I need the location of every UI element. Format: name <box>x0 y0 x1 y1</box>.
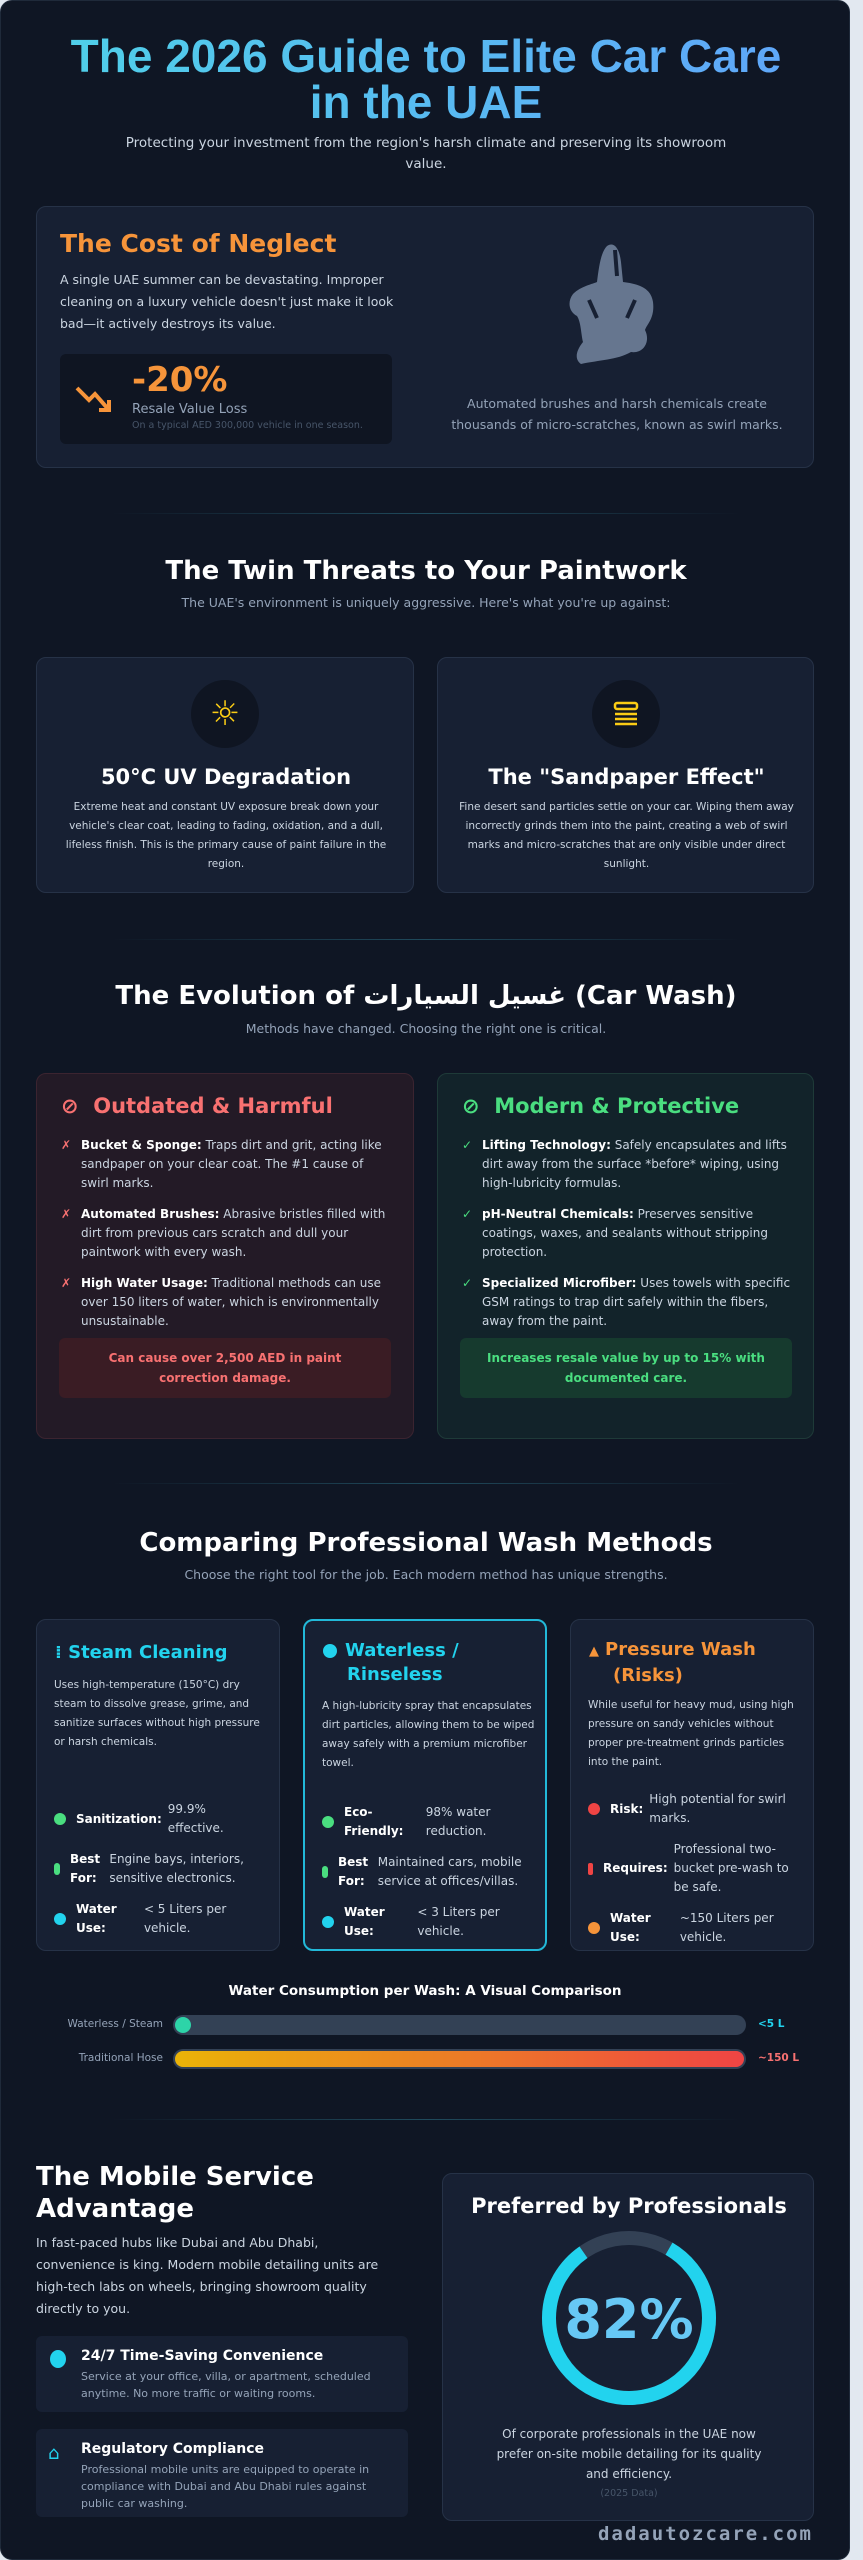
title: pressure: ▲ Pressure Wash <box>589 1639 756 1660</box>
stats: waterless: Best For: <box>338 1855 368 1888</box>
heading: mobile service: The Mobile Service Advantage <box>36 2162 314 2224</box>
icon: trending down <box>76 386 111 412</box>
panel: cost of neglect <box>36 206 814 468</box>
panel: UV degradation <box>36 657 414 893</box>
stats: waterless: Maintained cars, mobile service at offices/villas. <box>378 1855 522 1888</box>
text: mobile intro: In fast-paced hubs like Dubai and Abu Dhabi, convenience is king. Modern mobile detailing units are high-tech labs on wheels, bringing showroom quality directly to you. <box>36 2235 378 2316</box>
stats: steam: Sanitization: <box>76 1812 162 1826</box>
heading: twin threats: The Twin Threats to Your Paintwork <box>165 556 687 586</box>
list: outdated items: High Water Usage: Traditional methods can use over 150 liters of water, which is environmentally unsustainable. <box>81 1276 381 1328</box>
list: modern items: Specialized Microfiber: Uses towels with specific GSM ratings to trap dirt safely within the fibers, away from the paint. <box>482 1276 790 1328</box>
list: outdated items: Bucket & Sponge: Traps dirt and grit, acting like sandpaper on your clear coat. The #1 cause of swirl marks. <box>81 1138 382 1190</box>
callout: 2500 AED <box>59 1338 391 1398</box>
stats: waterless: Eco-Friendly: <box>344 1805 403 1838</box>
panel: steam cleaning <box>36 1619 280 1951</box>
stat box: -20% <box>60 354 392 444</box>
heading: outdated: ⊘ Outdated & Harmful <box>61 1094 333 1118</box>
text: sandpaper: Fine desert sand particles settle on your car. Wiping them away incorrectly grinds them into the paint, creating a web of swirl marks and micro-scratches that are only visible under direct sunlight. <box>459 801 794 870</box>
box: 24/7 convenience: Service at your office, villa, or apartment, scheduled anytime. No more traffic or waiting rooms. <box>81 2370 371 2400</box>
list: modern items: ✓ <box>462 1276 472 1290</box>
icon: sun: ☼ <box>210 694 240 734</box>
title: preferred: Preferred by Professionals <box>471 2194 787 2218</box>
text: pressure: While useful for heavy mud, using high pressure on sandy vehicles without proper pre-treatment grinds particles into the paint. <box>588 1699 794 1768</box>
chart: 82% donut: 82% <box>564 2288 694 2351</box>
stats: pressure: Professional two-bucket pre-wash to be safe. <box>674 1842 789 1894</box>
text: intro: A single UAE summer can be devastating. Improper cleaning on a luxury vehicle doesn't just make it look bad—it actively destroys its value. <box>60 272 393 331</box>
stats: steam: < 5 Liters per vehicle. <box>144 1902 226 1935</box>
subheading: evolution: Methods have changed. Choosing the right one is critical. <box>246 1021 606 1036</box>
list: modern items: ✓ <box>462 1207 472 1221</box>
subheading: twin threats: The UAE's environment is uniquely aggressive. Here's what you're up against: <box>182 595 670 610</box>
stats: waterless: 98% water reduction. <box>426 1805 490 1838</box>
list: outdated items <box>61 1138 385 1328</box>
list: modern items: Lifting Technology: Safely encapsulates and lifts dirt away from the surface *before* wiping, using high-lubricity formulas. <box>482 1138 787 1190</box>
stats: pressure: Risk: <box>610 1802 643 1816</box>
stats: pressure: Requires: <box>603 1861 668 1875</box>
icon: car seat silhouette <box>570 244 654 364</box>
title <box>31 33 821 125</box>
box: 24/7 convenience <box>36 2336 408 2412</box>
title: steam: ⁞ Steam Cleaning <box>55 1642 227 1663</box>
title: pressure <box>589 1639 756 1686</box>
stat box: -20%: Resale Value Loss <box>132 402 247 417</box>
text: UV: Extreme heat and constant UV exposure break down your vehicle's clear coat, leading to fading, oxidation, and a dull, lifeless finish. This is the primary cause of paint failure in the region. <box>66 801 386 870</box>
title: sandpaper: The "Sandpaper Effect" <box>488 765 765 789</box>
callout: resale value <box>460 1338 792 1398</box>
list: modern items <box>462 1138 790 1328</box>
callout: resale value: Increases resale value by up to 15% with <box>487 1351 765 1365</box>
bar: waterless/steam <box>68 2015 784 2035</box>
title: pressure: (Risks) <box>613 1665 683 1686</box>
title: waterless: Waterless / <box>345 1640 459 1661</box>
icon: house: ⌂ <box>48 2443 59 2464</box>
panel: sandpaper effect <box>437 657 814 893</box>
title: in the UAE <box>310 76 542 128</box>
icon: layers <box>592 680 660 748</box>
box: 24/7 convenience: 24/7 Time-Saving Convenience <box>81 2348 323 2364</box>
title: waterless <box>323 1640 459 1685</box>
heading: comparing: Comparing Professional Wash Methods <box>139 1528 713 1558</box>
bar: waterless/steam: Waterless / Steam <box>68 2018 163 2030</box>
stats: steam: Best For: <box>70 1852 100 1885</box>
panel: modern & protective <box>437 1073 814 1439</box>
list: modern items: pH-Neutral Chemicals: Preserves sensitive coatings, waxes, and sealants without stripping protection. <box>482 1207 768 1259</box>
stats: waterless: < 3 Liters per vehicle. <box>417 1905 500 1938</box>
bar: traditional hose: Traditional Hose <box>79 2052 163 2064</box>
heading: cost of neglect: The Cost of Neglect <box>60 229 336 258</box>
stats: waterless <box>322 1805 522 1938</box>
list: outdated items: ✗ <box>61 1276 71 1290</box>
callout: resale value: documented care. <box>565 1371 687 1385</box>
title: waterless: Rinseless <box>347 1664 443 1685</box>
title: The 2026 Guide to Elite Car Care <box>71 30 781 82</box>
title: UV: 50°C UV Degradation <box>101 765 351 789</box>
panel: preferred by professionals <box>442 2173 814 2521</box>
list: outdated items: ✗ <box>61 1207 71 1221</box>
stat box: -20%: On a typical AED 300,000 vehicle in one season. <box>132 420 363 431</box>
callout: 2500 AED: Can cause over 2,500 AED in paint <box>109 1351 341 1365</box>
text: waterless: A high-lubricity spray that encapsulates dirt particles, allowing them to be wiped away safely with a premium microfiber towel. <box>322 1700 534 1769</box>
stats: steam: Water Use: <box>76 1902 117 1935</box>
icon: clock <box>50 2350 66 2368</box>
chart title: Water Consumption per Wash: A Visual Comparison <box>228 1983 622 1999</box>
stats: pressure: ~150 Liters per vehicle. <box>680 1911 774 1944</box>
bar: waterless/steam: <5 L <box>758 2018 784 2030</box>
panel: preferred by professionals: (2025 Data) <box>600 2488 658 2499</box>
heading: modern: ⊘ Modern & Protective <box>462 1094 739 1118</box>
stats: pressure: High potential for swirl marks. <box>649 1792 786 1825</box>
footer: brand: dadautozcare.com <box>598 2523 813 2545</box>
panel: waterless <box>303 1619 547 1951</box>
caption: preferred: Of corporate professionals in the UAE now prefer on-site mobile detailing for its quality and efficiency. <box>497 2427 761 2481</box>
list: outdated items: Automated Brushes: Abrasive bristles filled with dirt from previous cars scratch and dull your paintwork with every wash. <box>81 1207 385 1259</box>
subheading: comparing: Choose the right tool for the job. Each modern method has unique strengths. <box>184 1567 668 1582</box>
stats: steam <box>54 1802 244 1935</box>
stats: pressure: Water Use: <box>610 1911 651 1944</box>
bar: traditional hose: ~150 L <box>758 2052 799 2064</box>
chart: water consumption <box>68 1983 799 2069</box>
chart: 82% donut <box>542 2231 716 2405</box>
caption: swirl marks: Automated brushes and harsh chemicals create thousands of micro-scratches, known as swirl marks. <box>451 396 783 432</box>
panel: pressure wash <box>570 1619 814 1951</box>
stats: pressure <box>588 1792 789 1944</box>
stat box: -20%: -20% <box>132 360 228 400</box>
box: regulatory compliance: Professional mobile units are equipped to operate in compliance with Dubai and Abu Dhabi rules against public car washing. <box>81 2463 369 2510</box>
box: regulatory compliance: Regulatory Compliance <box>81 2441 264 2457</box>
list: outdated items: ✗ <box>61 1138 71 1152</box>
panel: outdated & harmful <box>36 1073 414 1439</box>
bar: traditional hose <box>78 2049 799 2069</box>
list: modern items: ✓ <box>462 1138 472 1152</box>
stats: waterless: Water Use: <box>344 1905 385 1938</box>
box: regulatory compliance <box>36 2429 408 2517</box>
callout: 2500 AED: correction damage. <box>159 1371 291 1385</box>
subtitle: Protecting your investment from the region's harsh climate and preserving its showroom value. <box>126 135 726 172</box>
stats: steam: Engine bays, interiors, sensitive electronics. <box>109 1852 244 1885</box>
stats: steam: 99.9% effective. <box>168 1802 224 1835</box>
icon: sun <box>191 680 259 748</box>
text: steam: Uses high-temperature (150°C) dry steam to dissolve grease, grime, and sanitize surfaces without high pressure or harsh chemicals. <box>54 1679 260 1748</box>
heading: evolution: The Evolution of غسيل السيارات (Car Wash) <box>115 981 737 1011</box>
